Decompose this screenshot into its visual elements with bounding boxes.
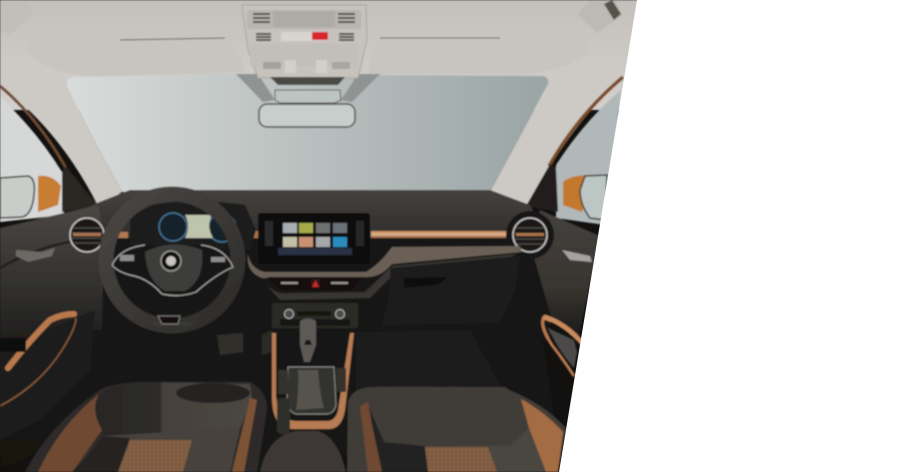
left dial	[159, 213, 187, 241]
right mirror	[563, 175, 607, 220]
climate panel	[272, 303, 358, 328]
wheel hub	[145, 244, 202, 291]
console buttons	[281, 32, 328, 41]
right orange pillar trim	[549, 77, 623, 166]
left A-pillar	[0, 55, 122, 208]
glovebox handle	[404, 277, 448, 288]
wheel spokes	[112, 244, 233, 298]
central vents	[267, 277, 363, 290]
console vents	[253, 13, 355, 41]
dashboard orange trim left	[100, 232, 128, 238]
glovebox	[382, 256, 520, 325]
handbrake	[277, 398, 290, 434]
left grab handle	[0, 0, 33, 35]
chrome spoke line	[112, 245, 233, 296]
right A-pillar	[490, 55, 625, 208]
left side window	[0, 97, 64, 222]
dark strip	[270, 77, 345, 85]
left sun visor	[26, 39, 245, 76]
right air vent	[506, 211, 554, 259]
interior scene	[0, 0, 640, 472]
center armrest	[260, 431, 346, 472]
white diagonal panel	[559, 0, 900, 472]
hazard button	[311, 279, 320, 288]
left dark triangle	[62, 166, 98, 212]
wheel shadow on seat	[176, 383, 250, 403]
spoke buttons	[120, 255, 134, 261]
left door handle recess	[16, 248, 55, 262]
red SOS button	[312, 32, 328, 40]
patterned insert	[118, 440, 192, 472]
console side switches	[278, 370, 288, 394]
right sun visor	[368, 39, 588, 74]
dashboard orange trim right	[371, 231, 511, 238]
dashboard top	[92, 190, 548, 238]
photo background	[0, 0, 640, 472]
footwell carpet	[356, 330, 500, 392]
left mirror	[0, 176, 61, 218]
mesh panels behind mirror	[236, 74, 380, 102]
infotainment screen	[258, 213, 370, 264]
left orange stripe	[360, 402, 382, 472]
left door panel	[0, 205, 104, 472]
left air vent	[70, 218, 104, 252]
brown dash band	[248, 246, 522, 278]
windshield	[67, 74, 548, 192]
right door handle	[562, 250, 592, 262]
center console trim	[272, 333, 354, 429]
lower left door	[0, 310, 95, 440]
instrument cluster	[130, 201, 256, 250]
overhead console	[242, 5, 367, 85]
passenger seat	[347, 387, 566, 472]
window switches	[0, 338, 26, 352]
seat back upper	[368, 387, 529, 445]
left door thin trim	[0, 318, 76, 406]
seat lower dark panel	[368, 405, 428, 472]
mirror mount	[275, 90, 341, 103]
wheel rim	[106, 194, 238, 326]
seat lower panel	[70, 428, 240, 472]
right dial	[208, 214, 236, 242]
right dark triangle	[526, 164, 558, 212]
lower cabin darkness	[30, 325, 555, 472]
right orange bolster	[232, 398, 257, 472]
right door panel	[532, 210, 600, 340]
app tiles	[283, 223, 297, 233]
seat base	[347, 387, 566, 472]
left orange bolster	[38, 394, 102, 472]
map display	[185, 215, 213, 238]
door seam	[0, 240, 82, 268]
gear knob	[300, 318, 316, 362]
left brown pillar trim	[0, 86, 66, 168]
pedals	[217, 333, 243, 355]
rear-view mirror	[259, 104, 355, 127]
driver seat	[25, 382, 267, 472]
wheel bottom button	[158, 316, 180, 324]
gear surround	[287, 367, 336, 414]
seat back upper	[93, 382, 252, 436]
Skoda logo	[161, 251, 181, 271]
right orange bolster	[521, 399, 563, 472]
right side window	[556, 90, 621, 225]
steering wheel	[106, 194, 238, 326]
reading lights	[263, 62, 281, 69]
headliner	[0, 0, 640, 110]
right door orange grip	[543, 317, 584, 376]
gear boot	[296, 370, 324, 410]
dash lower dark	[80, 238, 550, 340]
left footwell	[105, 335, 260, 392]
lower dash strip	[262, 254, 517, 300]
patterned insert	[425, 447, 497, 472]
left door orange grip	[8, 314, 74, 368]
seat base	[25, 382, 267, 472]
right grab handle	[578, 0, 622, 33]
